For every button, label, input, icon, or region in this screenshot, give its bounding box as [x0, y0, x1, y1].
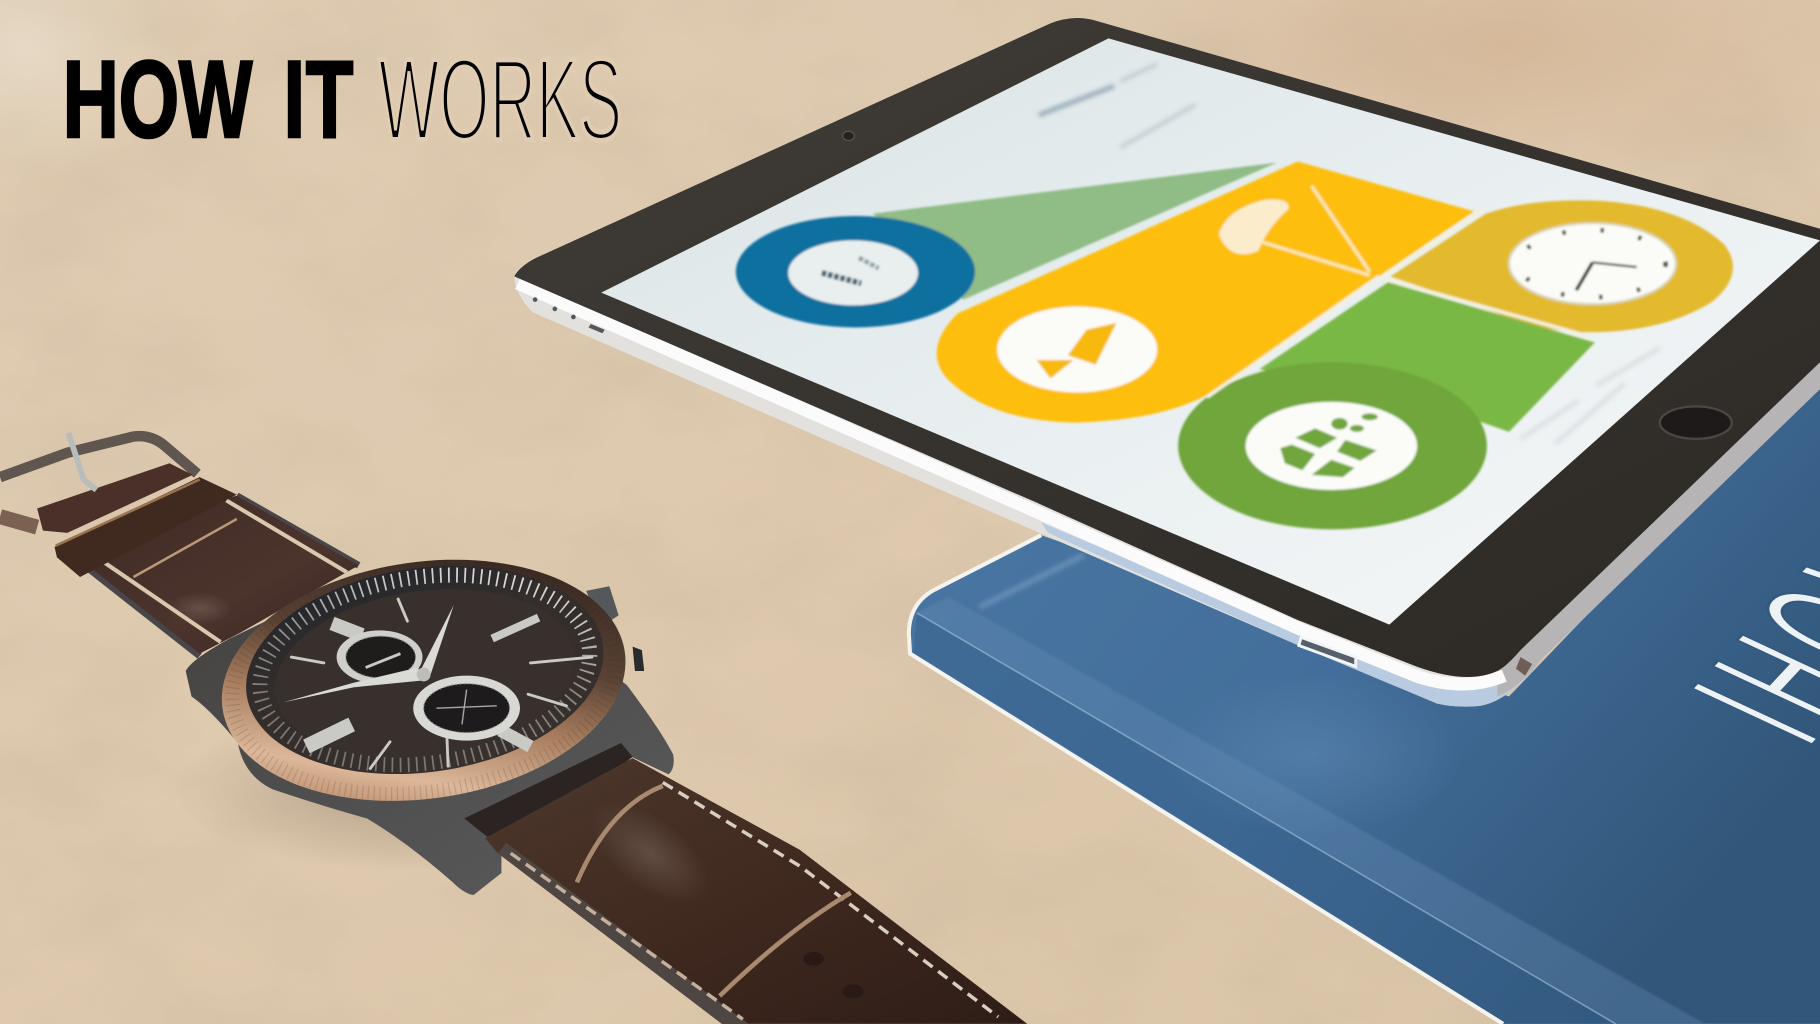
screen: blue ring [736, 216, 975, 327]
strap keeper loop [55, 477, 237, 577]
buckle [0, 436, 197, 527]
tablet edge scuff [1516, 657, 1532, 676]
wristwatch [0, 433, 1027, 1024]
top strap stitching [88, 500, 347, 642]
title: how it works: WORKS [378, 34, 622, 164]
notebook cover [909, 372, 1820, 1024]
case underside shadow [464, 743, 633, 842]
tablet [514, 18, 1820, 707]
notebook page edge [909, 535, 1503, 1024]
screen divider lines [1207, 209, 1590, 397]
dial minute ticks [248, 555, 602, 785]
top strap [80, 496, 359, 654]
strap holes [803, 952, 864, 998]
icon: yellow cone marker [1037, 323, 1117, 379]
notebook spine band [917, 597, 1705, 1024]
watch contact shadow [174, 708, 638, 871]
tablet side switches [533, 297, 605, 333]
lower strap stitching [511, 782, 998, 1019]
tablet screen [601, 38, 1820, 625]
watch dial [232, 544, 617, 796]
tablet screen shapes [736, 161, 1733, 529]
copper bezel [206, 535, 641, 826]
hour markers [291, 599, 592, 769]
watch crown [586, 586, 644, 671]
tablet faint screen text [1039, 64, 1660, 444]
watch case [186, 604, 674, 895]
lower strap creases [577, 786, 851, 996]
tablet silver body [514, 18, 1820, 707]
right subdial [413, 676, 520, 741]
notebook spine highlight [917, 613, 1616, 1024]
tablet right metal edge [1497, 362, 1820, 697]
top strap sheen [167, 592, 232, 625]
tablet black bezel [514, 18, 1820, 677]
strap side edge [498, 843, 749, 1024]
tablet camera [843, 131, 854, 141]
screen: yellow circle center [997, 307, 1157, 392]
top strap tail [37, 463, 193, 533]
watch hands [283, 605, 454, 702]
notebook lower spine [913, 613, 1616, 1024]
clock on mustard capsule [1509, 223, 1676, 304]
watch lower strap [485, 758, 1027, 1024]
screen: yellow panel [937, 161, 1474, 423]
bezel brushed texture [217, 543, 630, 817]
dial centre face [264, 571, 586, 776]
notebook groove [980, 555, 1084, 607]
icon: small marks in blue ring [822, 258, 879, 283]
tablet lower blue reflection edge [1041, 522, 1540, 707]
tablet home button [1660, 406, 1732, 439]
top strap dark edges [80, 496, 359, 656]
buckle pin [68, 433, 96, 490]
left subdial [337, 630, 422, 684]
title: how it works: HOW IT [63, 39, 353, 161]
tablet white chamfer [518, 283, 1504, 684]
icon: gift box [1280, 413, 1378, 477]
lower strap sheen [573, 784, 727, 923]
title: how it works [63, 34, 622, 164]
screen: green square [1259, 282, 1595, 432]
hammer icon on yellow panel [1219, 186, 1370, 275]
screen: light green wedge [873, 163, 1277, 300]
tablet charging port [1299, 637, 1356, 666]
notebook soft sheen [1161, 673, 1462, 836]
keeper highlight stitching [56, 480, 200, 546]
screen: blue ring center [788, 240, 918, 305]
screen: green circle center [1245, 402, 1417, 490]
screen: green circle [1178, 362, 1487, 529]
notebook [909, 372, 1820, 1024]
screen: mustard capsule [1391, 200, 1733, 332]
